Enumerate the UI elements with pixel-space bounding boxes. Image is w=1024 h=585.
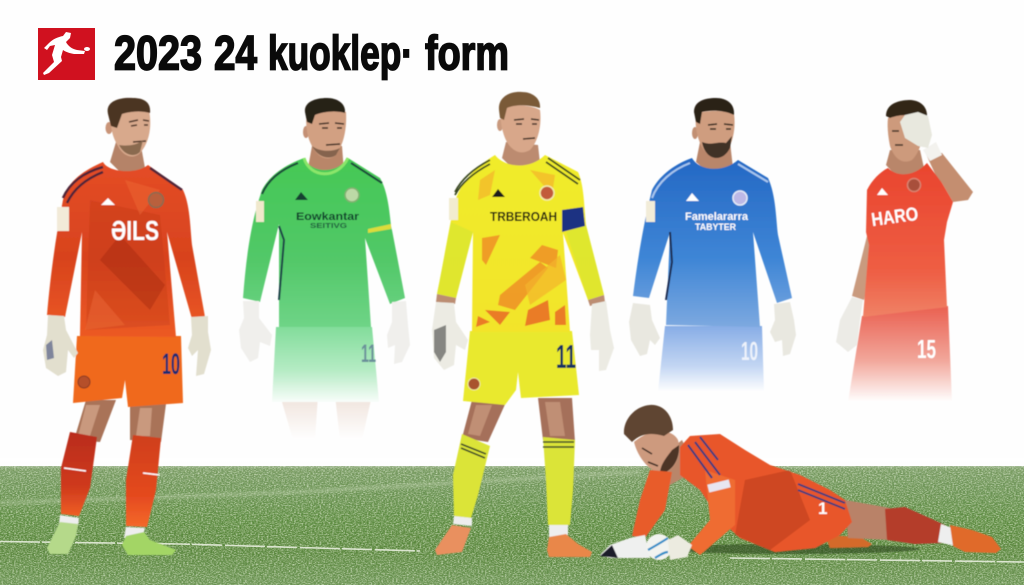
gloves <box>432 302 468 370</box>
raised arm <box>925 152 973 202</box>
right arm <box>688 470 735 555</box>
jersey <box>243 158 405 327</box>
stubble <box>312 146 340 158</box>
armband <box>368 224 391 233</box>
facial features <box>319 123 344 145</box>
maker logo <box>492 189 505 197</box>
logo: league badge <box>38 28 95 80</box>
shorts number: 10 <box>162 348 180 381</box>
jersey pattern <box>86 200 170 330</box>
side piping <box>666 232 672 300</box>
captain armband <box>562 207 585 232</box>
left arm <box>852 232 874 300</box>
socks white <box>453 516 568 538</box>
far boot <box>825 535 872 548</box>
faded shorts <box>658 326 764 392</box>
gloves <box>629 303 660 356</box>
jersey <box>633 158 792 327</box>
maker logo <box>295 192 308 200</box>
sponsor: HARO <box>870 204 920 231</box>
face <box>696 111 735 157</box>
raised glove <box>900 112 932 148</box>
sleeve patch <box>256 201 264 222</box>
ball <box>646 534 672 560</box>
facial features <box>514 119 539 139</box>
shorts number: 11 <box>361 340 376 368</box>
ear <box>497 119 503 131</box>
forearm shading <box>437 222 604 300</box>
thigh <box>845 500 892 540</box>
jersey <box>863 163 953 317</box>
title: 24 <box>214 28 257 80</box>
sock marks <box>64 468 160 520</box>
shorts badge <box>468 378 480 390</box>
boots <box>47 522 78 554</box>
beard <box>660 445 679 474</box>
sponsor: Eowkantar <box>296 211 360 223</box>
gloves <box>600 535 650 558</box>
crest <box>148 192 164 208</box>
glove detail <box>46 340 54 360</box>
sleeve patch <box>449 198 458 220</box>
shorts number: 15 <box>917 334 936 364</box>
collar <box>304 158 348 174</box>
wrists <box>436 294 605 306</box>
neck <box>110 142 145 174</box>
shoulder stripes <box>455 158 580 195</box>
socks white <box>59 515 145 538</box>
hair <box>886 100 927 118</box>
stubble <box>119 140 143 155</box>
jersey <box>47 162 205 337</box>
jersey shading <box>735 470 810 550</box>
player: yellow goalkeeper <box>432 92 614 557</box>
sponsor: ƏILS <box>111 215 159 246</box>
face <box>888 115 924 162</box>
sponsor: TRBEROAH <box>490 209 557 224</box>
shorts <box>73 336 183 407</box>
legs <box>74 400 166 442</box>
player: blue goalkeeper <box>629 98 796 392</box>
face <box>111 107 150 157</box>
beard <box>702 136 732 158</box>
sponsor patch <box>707 479 731 493</box>
shorts number: 10 <box>741 336 758 366</box>
ear <box>106 122 112 134</box>
crest <box>733 191 747 205</box>
neck <box>696 142 733 176</box>
shorts <box>463 331 579 405</box>
shorts badge <box>78 376 90 388</box>
shorts number: 11 <box>556 338 576 375</box>
hair <box>305 98 345 124</box>
sock white <box>938 524 958 546</box>
jersey body <box>680 434 852 552</box>
boot <box>950 525 1001 553</box>
neck <box>655 440 697 485</box>
faded legs <box>280 395 372 440</box>
maker logo <box>686 193 699 201</box>
sleeve stripes <box>688 437 845 509</box>
neck <box>308 146 344 180</box>
side piping <box>279 226 284 300</box>
gloves <box>239 301 272 362</box>
title: 2023 <box>114 28 202 80</box>
maker logo <box>101 198 115 205</box>
sponsor line 2: TABYTER <box>695 222 736 232</box>
socks <box>453 434 575 525</box>
neck <box>502 142 540 172</box>
shoulder stripes <box>262 163 382 194</box>
facial features <box>892 131 903 145</box>
title: kuoklep· <box>268 28 413 80</box>
gloves <box>43 315 78 376</box>
sock bands <box>461 442 574 458</box>
sleeve patch <box>57 207 69 231</box>
boots <box>435 525 471 555</box>
sleeve patch <box>646 201 655 222</box>
jersey pattern <box>482 235 558 310</box>
player: orange goalkeeper <box>43 98 211 555</box>
player: red goalkeeper <box>836 100 973 402</box>
legs <box>462 398 575 442</box>
hair <box>499 92 540 120</box>
title: form <box>425 28 509 80</box>
hair <box>624 405 673 442</box>
facial features <box>642 448 658 466</box>
left arm <box>632 470 672 538</box>
player: diving goalkeeper on ground <box>600 405 1001 560</box>
crest <box>345 188 359 202</box>
wrist band <box>923 142 942 161</box>
faded shorts <box>272 327 379 402</box>
shoulder stripes <box>652 163 768 198</box>
facial features <box>708 124 733 129</box>
crest <box>908 178 920 192</box>
title <box>114 28 509 80</box>
grass pitch <box>0 458 1024 585</box>
faded shorts <box>848 306 952 402</box>
sock <box>885 507 945 544</box>
neck <box>886 150 924 180</box>
left glove <box>836 297 863 352</box>
hair <box>694 98 734 124</box>
maker logo <box>877 188 888 195</box>
shorts number: 1 <box>818 499 827 518</box>
right glove <box>668 535 692 560</box>
pitch shadow <box>660 544 920 554</box>
player: green goalkeeper <box>239 98 410 440</box>
ear <box>303 126 309 138</box>
sponsor: Famelararra <box>685 211 749 223</box>
face <box>501 105 541 152</box>
face <box>306 108 346 158</box>
facial features <box>129 120 149 142</box>
hair <box>108 98 150 128</box>
ear <box>692 127 698 139</box>
socks <box>61 432 97 516</box>
crest <box>540 186 554 200</box>
face <box>634 431 679 474</box>
shoulder stripes <box>63 167 182 203</box>
jersey <box>437 155 604 332</box>
sponsor line 2: SEITIVG <box>310 223 348 230</box>
